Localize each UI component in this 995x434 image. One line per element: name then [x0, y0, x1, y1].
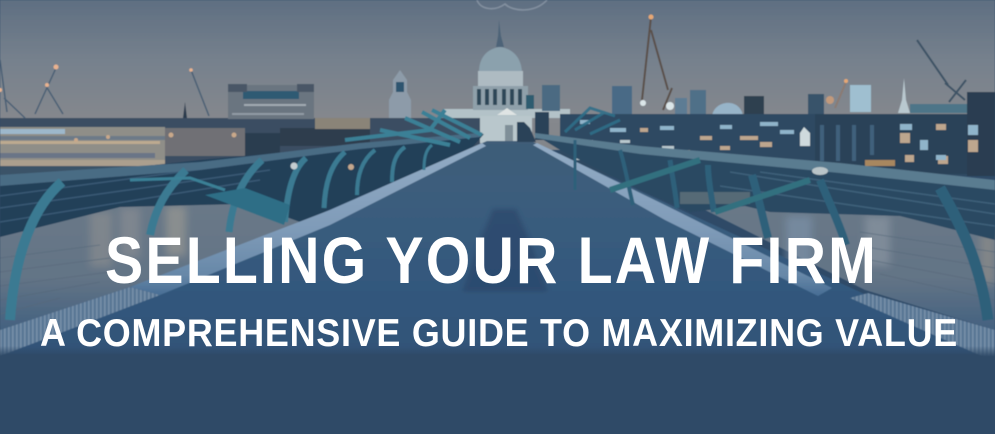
left railing hatch — [0, 287, 160, 356]
left railing — [130, 143, 486, 295]
left top rail — [0, 133, 480, 186]
right bridge canopy — [565, 108, 620, 134]
right top rail — [535, 133, 995, 190]
river right — [665, 190, 995, 330]
city towers right — [542, 78, 968, 118]
water reflections — [90, 206, 995, 284]
street lamps — [290, 162, 828, 175]
right bridge arches — [575, 140, 988, 320]
crane lights left — [0, 64, 193, 92]
river left — [0, 200, 330, 330]
water ripple lines — [0, 232, 995, 314]
dark bridge strips left — [0, 160, 270, 222]
left teal brace — [205, 188, 290, 225]
dark bridge structure left — [0, 134, 484, 237]
dark bridge structure right — [534, 134, 995, 240]
left bridge canopy — [130, 110, 482, 190]
crane lights right — [640, 14, 848, 110]
dark bridge strips right — [720, 172, 995, 226]
building lights — [74, 132, 236, 142]
cranes right — [642, 17, 966, 110]
title: SELLING YOUR LAW FIRM — [105, 223, 878, 297]
right railing hatch — [850, 293, 995, 362]
walkway centre shadow — [462, 209, 548, 292]
church spire left — [183, 102, 187, 118]
small tower — [389, 70, 411, 118]
office block — [228, 84, 314, 119]
left bridge arches — [10, 145, 432, 320]
sky — [0, 0, 995, 150]
people on the bridge — [517, 122, 536, 142]
bottom solid band — [0, 346, 995, 434]
walkway deck — [0, 141, 995, 354]
right railing — [533, 143, 832, 296]
left waterfront buildings — [0, 70, 480, 178]
Saint Paul's dome — [443, 20, 570, 143]
riverbank patch behind right bridge — [680, 192, 750, 204]
right waterfront buildings — [560, 92, 995, 176]
left cranes — [0, 60, 209, 118]
ornament at top of image — [477, 0, 547, 10]
right bridge braces — [610, 160, 810, 212]
